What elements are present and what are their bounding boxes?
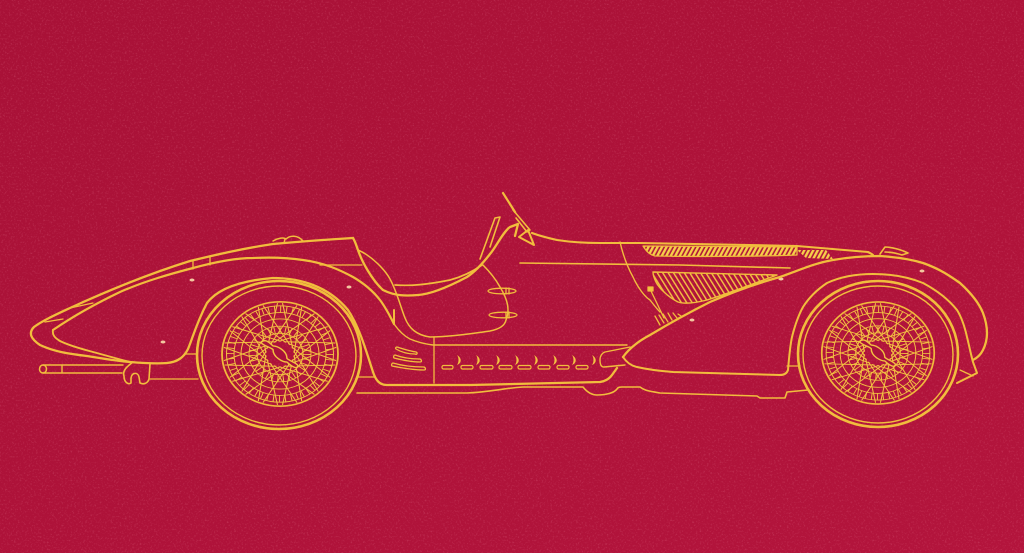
manifold outlet (600, 347, 630, 367)
sill crescents (457, 355, 596, 365)
side vent louvres (392, 347, 426, 370)
door shut line (433, 337, 435, 383)
front wing outline (623, 256, 987, 383)
radiator pin and small vent (648, 287, 681, 325)
exhaust pipe (40, 365, 123, 373)
car line drawing (31, 193, 987, 429)
filler cap (273, 236, 303, 243)
tail and rear body outline (31, 238, 617, 385)
front filler cap (880, 247, 908, 255)
rear wheel (197, 281, 361, 429)
door hinges (488, 288, 517, 318)
lower bonnet vent (653, 272, 777, 303)
front wheel (798, 281, 958, 427)
rear hanger bracket (124, 362, 150, 384)
bonnet lines (520, 233, 873, 312)
sill slots (442, 366, 588, 369)
upper bonnet vent (643, 246, 833, 259)
windscreen (480, 193, 534, 259)
body detail dots (160, 270, 924, 344)
underbody line (357, 387, 808, 398)
cockpit opening (353, 224, 627, 345)
